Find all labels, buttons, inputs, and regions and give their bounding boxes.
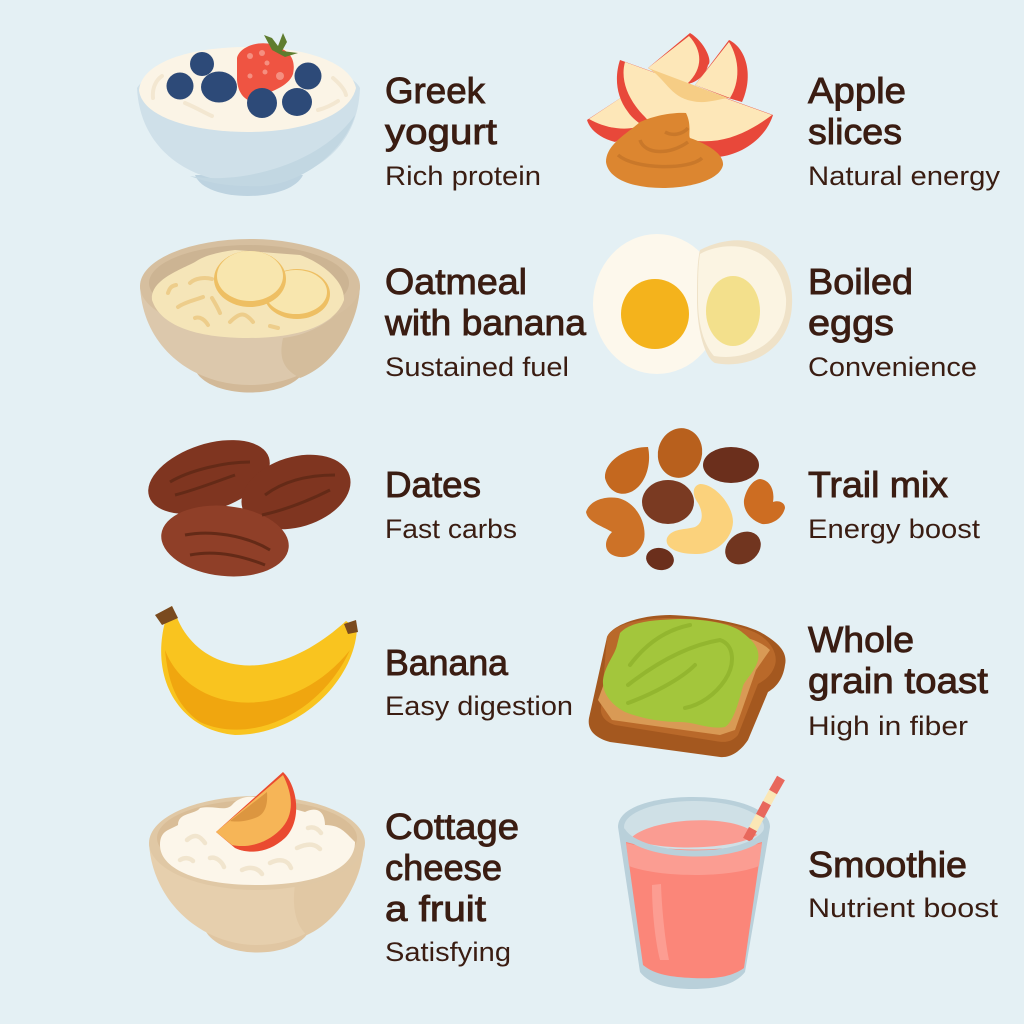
icon: avocado toast xyxy=(589,615,786,757)
icon: oatmeal bowl xyxy=(140,239,360,392)
heading: Apple slices: Natural energy xyxy=(808,161,1001,191)
heading: Cottage cheese a fruit: Cottage xyxy=(385,806,519,847)
icon: apple slices with peanut butter xyxy=(587,33,773,188)
icon: cottage cheese bowl xyxy=(149,772,365,952)
heading: Whole grain toast: Whole xyxy=(808,619,914,660)
heading: Banana xyxy=(385,642,573,721)
heading: Greek yogurt: yogurt xyxy=(385,111,497,152)
icon: trail mix xyxy=(586,423,785,573)
heading: Oatmeal with banana: with banana xyxy=(384,302,587,343)
heading: Banana: Banana xyxy=(385,642,509,683)
heading: Dates: Fast carbs xyxy=(385,514,517,544)
heading: Oatmeal with banana: Oatmeal xyxy=(385,261,527,302)
heading: Trail mix: Trail mix xyxy=(808,464,948,505)
heading: Dates: Dates xyxy=(385,464,481,505)
icon: striped straw xyxy=(747,778,781,840)
heading: Cottage cheese a fruit: a fruit xyxy=(385,888,486,929)
heading: Oatmeal with banana: Sustained fuel xyxy=(385,352,569,382)
icon: banana xyxy=(155,606,358,735)
heading: Boiled eggs: Convenience xyxy=(808,352,977,382)
heading: Smoothie: Nutrient boost xyxy=(808,893,999,923)
heading: Apple slices: slices xyxy=(808,111,902,152)
heading: Trail mix: Energy boost xyxy=(808,514,981,544)
heading: Whole grain toast: grain toast xyxy=(808,660,988,701)
heading: Banana: Easy digestion xyxy=(385,691,573,721)
heading: Boiled eggs xyxy=(808,261,977,382)
heading: Whole grain toast: High in fiber xyxy=(808,711,968,741)
heading: Smoothie xyxy=(808,844,999,923)
icon: dates xyxy=(139,426,360,582)
icon: smoothie glass xyxy=(618,778,781,989)
heading: Boiled eggs: eggs xyxy=(808,302,894,343)
icon: boiled eggs xyxy=(593,234,792,374)
heading: Cottage cheese a fruit xyxy=(385,806,519,967)
heading: Greek yogurt xyxy=(385,70,541,191)
heading: Apple slices: Apple xyxy=(808,70,906,111)
heading: Apple slices xyxy=(808,70,1001,191)
heading: Greek yogurt: Rich protein xyxy=(385,161,541,191)
heading: Greek yogurt: Greek xyxy=(385,70,486,111)
heading: Cottage cheese a fruit: cheese xyxy=(385,847,502,888)
heading: Boiled eggs: Boiled xyxy=(808,261,913,302)
heading: Cottage cheese a fruit: Satisfying xyxy=(385,937,511,967)
heading: Dates xyxy=(385,464,517,544)
heading: Whole grain toast xyxy=(808,619,988,741)
heading: Oatmeal with banana xyxy=(384,261,587,382)
heading: Trail mix xyxy=(808,464,981,544)
heading: Smoothie: Smoothie xyxy=(808,844,967,885)
icon: greek yogurt bowl xyxy=(137,33,360,196)
